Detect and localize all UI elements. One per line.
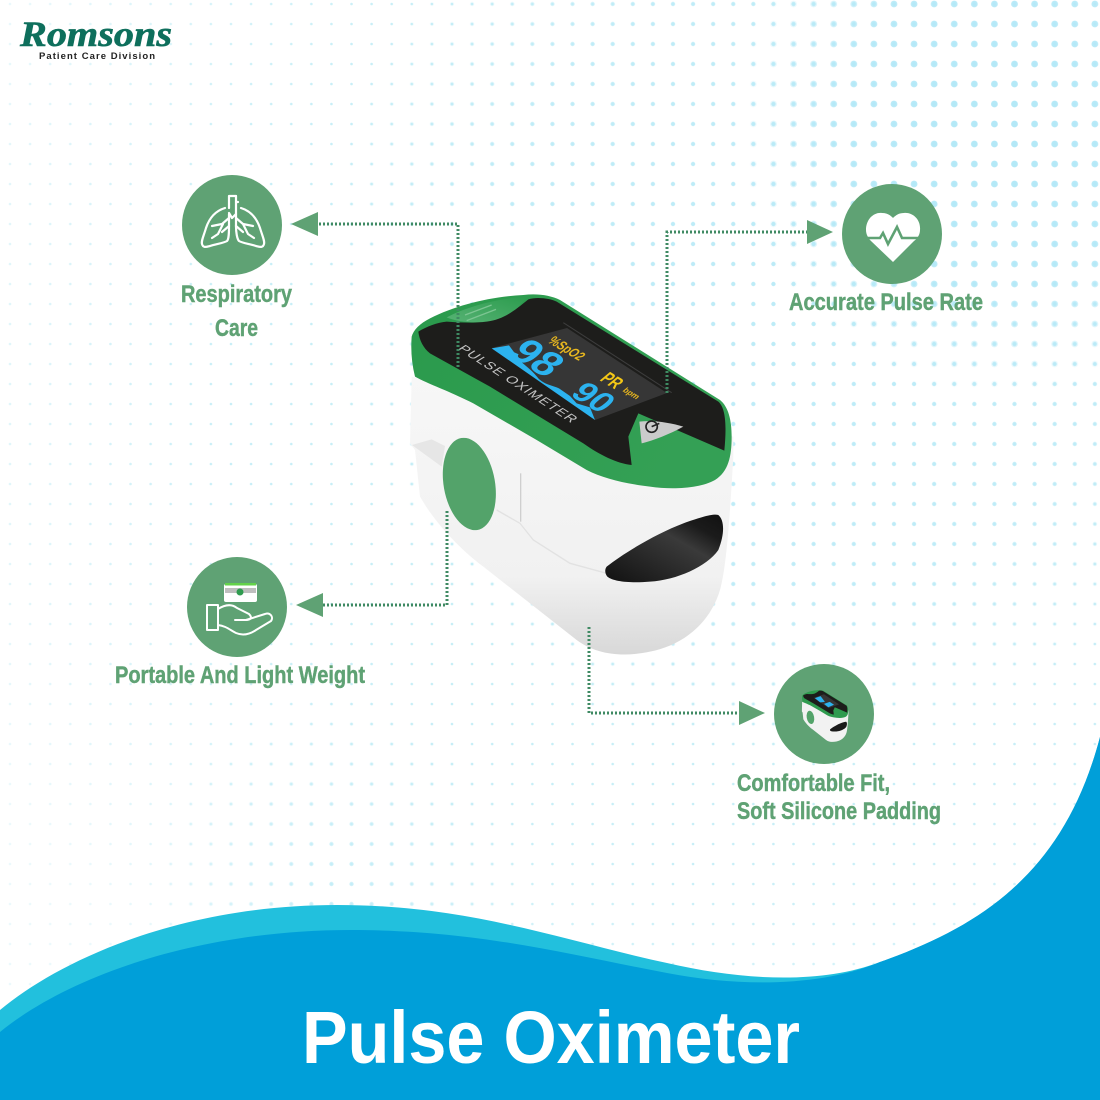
- icon: small device: [774, 664, 874, 764]
- product: pulse oximeter device: [410, 294, 733, 654]
- label: Respiratory: [181, 281, 293, 308]
- icon: hand holding device: [187, 557, 287, 657]
- label: Accurate Pulse Rate: [789, 289, 983, 316]
- finger slot notch: [412, 439, 445, 467]
- label: Care: [215, 315, 258, 342]
- PR label: PR: [595, 369, 628, 393]
- finger hole: [605, 515, 723, 582]
- connector: respiratory care: [291, 212, 458, 367]
- reading 90: 90: [563, 377, 623, 419]
- teal wave: [0, 737, 1100, 1100]
- blue footer wave: [0, 737, 1100, 1100]
- body seam: [497, 510, 607, 573]
- power icon: [646, 421, 659, 432]
- connector: portable: [296, 511, 447, 617]
- device body: [410, 377, 733, 654]
- logo subtitle: Patient Care Division: [39, 51, 155, 62]
- body vertical seam: [519, 473, 523, 522]
- label: Comfortable Fit,: [737, 770, 890, 797]
- screen: [492, 328, 667, 420]
- grip ridges: [465, 305, 496, 321]
- feature: accurate pulse rate: [789, 184, 983, 316]
- connector: accurate pulse rate: [667, 220, 833, 393]
- reading 98: 98: [500, 331, 575, 384]
- screen slit: [563, 323, 672, 393]
- icon: lungs: [182, 175, 282, 275]
- label: Portable And Light Weight: [115, 662, 365, 689]
- device label: PULSE OXIMETER: [455, 343, 581, 425]
- green casing: [411, 294, 732, 488]
- device shell: [410, 294, 733, 654]
- grip bump: [447, 297, 527, 322]
- SpO2 label: %SpO2: [544, 334, 588, 364]
- title: Pulse Oximeter: [302, 996, 800, 1079]
- feature: respiratory care: [181, 175, 293, 342]
- logo: [19, 14, 172, 62]
- black face: [418, 298, 726, 465]
- feature: comfortable fit: [737, 664, 941, 825]
- screen blue waves: [492, 345, 595, 420]
- feature: portable and light weight: [115, 557, 365, 689]
- connector: comfortable fit: [589, 627, 765, 725]
- side green button: [436, 434, 503, 534]
- bpm label: bpm: [620, 386, 643, 401]
- gray button: [639, 421, 683, 443]
- icon: heart with pulse: [842, 184, 942, 284]
- logo wordmark: Romsons: [19, 14, 172, 54]
- label: Soft Silicone Padding: [737, 798, 941, 825]
